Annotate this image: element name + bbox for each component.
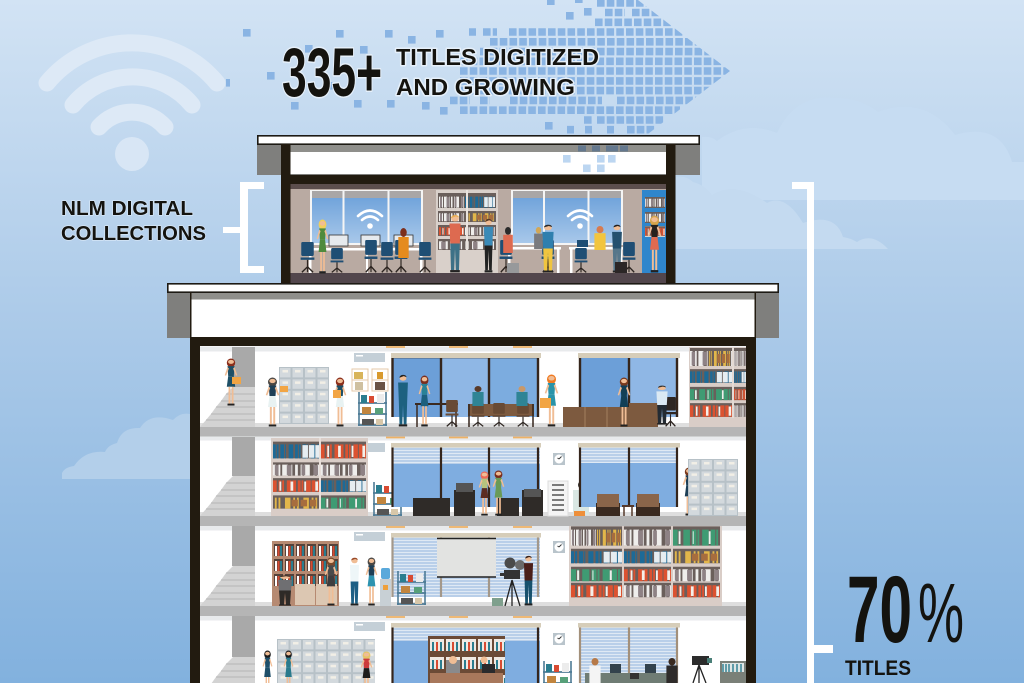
- bookcase: [436, 190, 498, 273]
- floor 1: archive and offices: [225, 347, 746, 427]
- desks and computers: [307, 235, 623, 273]
- floor 3: film and books: [272, 526, 722, 606]
- window 2: [578, 353, 680, 417]
- cart: [358, 392, 387, 426]
- outer walls: [190, 346, 756, 683]
- cart: [373, 482, 402, 516]
- low cabinet: [720, 661, 746, 683]
- air conditioner: [354, 622, 385, 631]
- icon: wifi signal: [47, 43, 217, 171]
- air conditioner: [354, 443, 385, 452]
- rooftop section: [257, 136, 700, 283]
- number: 335+: 335+: [282, 34, 382, 111]
- window frame: [391, 533, 541, 597]
- stairwell: [200, 347, 255, 683]
- window with blinds: [391, 443, 541, 507]
- clock: [553, 541, 565, 553]
- people by the cabinet: [263, 650, 372, 683]
- video camera: [692, 656, 712, 683]
- building: [167, 136, 779, 683]
- large bookcase: [271, 438, 368, 516]
- arrow squares over the rooftop: [563, 148, 628, 172]
- right window with wifi: [511, 190, 623, 245]
- text: titles digitized and growing: [396, 44, 599, 100]
- bracket: 70 percent of titles: [792, 182, 833, 683]
- floor 4: front desk and workstations: [263, 622, 746, 683]
- window with blinds and workstations: [578, 623, 680, 683]
- label: NLM digital collections: NLM DIGITAL: [61, 197, 193, 220]
- attic room: digital collections: [290, 184, 666, 283]
- chairs: [301, 240, 635, 272]
- pixelated digitization arrow: [226, 0, 730, 130]
- projection screen: [437, 538, 496, 577]
- bracket: digital collections: [223, 182, 264, 273]
- water cooler: [380, 568, 391, 606]
- binder cabinet: [272, 541, 339, 606]
- left window with wifi: [310, 190, 423, 245]
- people on floor 2: [479, 467, 695, 516]
- people with binders: [278, 557, 377, 606]
- air conditioner: [354, 532, 385, 541]
- film stand: [548, 481, 589, 516]
- window 2 with blinds: [578, 443, 680, 507]
- people in the digital room: [317, 215, 661, 273]
- label: titles: TITLES: [845, 657, 911, 680]
- large bookcase: [569, 526, 722, 606]
- clock: [553, 453, 565, 465]
- window with reception shelf: [391, 623, 541, 683]
- window 1: [391, 353, 541, 417]
- air conditioner: [354, 353, 385, 362]
- people on floor 1: [225, 358, 668, 426]
- main roof section: [167, 284, 779, 346]
- clock: [553, 633, 565, 645]
- window with blinds: [392, 537, 540, 597]
- cart: [543, 661, 572, 683]
- filing cabinet: [277, 639, 375, 683]
- label: NLM digital collections: COLLECTIONS: [61, 222, 206, 245]
- armchairs: [596, 494, 660, 516]
- number: 70%: %: [918, 566, 964, 660]
- text: titles digitized and growing: TITLES DIGITIZED: [396, 44, 599, 70]
- interior: [200, 346, 746, 683]
- bookcase: [689, 347, 746, 427]
- filing cabinet: [279, 367, 329, 424]
- text: titles digitized and growing: AND GROWING: [396, 74, 575, 100]
- small shelves: [352, 369, 388, 391]
- clouds: [62, 98, 1024, 479]
- desks and chairs: [415, 397, 676, 427]
- label: NLM digital collections: [61, 197, 206, 245]
- floor 2: books and equipment: [271, 438, 738, 516]
- headline: 335+ titles digitized: [282, 34, 599, 111]
- number: 70%: 70: [847, 557, 912, 663]
- blue bookcase: [642, 190, 666, 273]
- floor slabs and ceilings: [200, 346, 746, 620]
- dark cabinets: [413, 483, 543, 516]
- stat: 70 percent titles: [845, 557, 964, 680]
- film projector and operator: [492, 556, 533, 606]
- filing cabinet: [688, 459, 738, 516]
- cart: [397, 571, 426, 605]
